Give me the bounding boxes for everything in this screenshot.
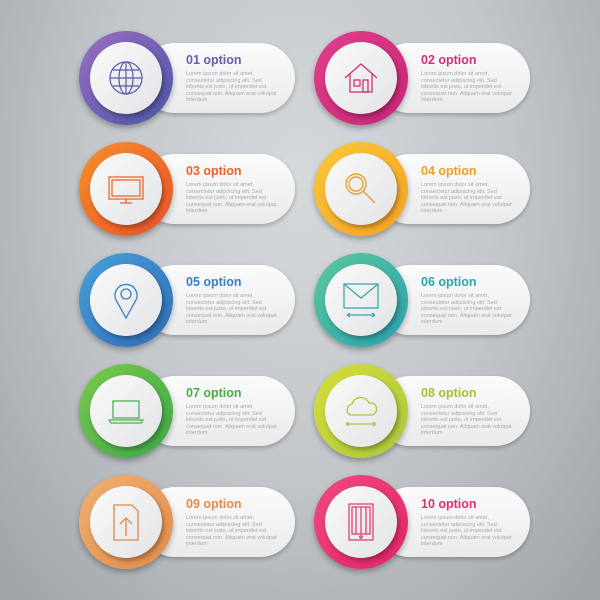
item 01: 01 option: [186, 53, 242, 67]
item 10: 10 option: [421, 497, 477, 511]
item 01: Lorem ipsum dolor sit amet, consectetur adipiscing elit. Sed lobortis est justo, ut imperdiet est consequat non. Aliquam erat volutpat interdum: [186, 71, 277, 103]
item 02: [311, 31, 532, 131]
item 06: [311, 253, 532, 353]
icon: laptop: [90, 375, 162, 447]
icon: house: [325, 42, 397, 114]
item 08: Lorem ipsum dolor sit amet, consectetur adipiscing elit. Sed lobortis est justo, ut imperdiet est consequat non. Aliquam erat volutpat interdum: [421, 404, 512, 436]
item 05: 05 option: [186, 275, 242, 289]
item 06: 06 option: [421, 275, 477, 289]
icon: envelope: [325, 264, 397, 336]
item 02: 02 option: [421, 53, 477, 67]
item 06: Lorem ipsum dolor sit amet, consectetur adipiscing elit. Sed lobortis est justo, ut imperdiet est consequat non. Aliquam erat volutpat interdum: [421, 293, 512, 325]
item 07: Lorem ipsum dolor sit amet, consectetur adipiscing elit. Sed lobortis est justo, ut imperdiet est consequat non. Aliquam erat volutpat interdum: [186, 404, 277, 436]
icon: magnifier: [325, 153, 397, 225]
item 09: Lorem ipsum dolor sit amet, consectetur adipiscing elit. Sed lobortis est justo, ut imperdiet est consequat non. Aliquam erat volutpat interdum: [186, 515, 277, 547]
icon: file upload: [90, 486, 162, 558]
item 07: [76, 364, 297, 464]
item 08: 08 option: [421, 386, 477, 400]
item 03: [76, 142, 297, 242]
icon: globe: [90, 42, 162, 114]
item 04: 04 option: [421, 164, 477, 178]
item 09: 09 option: [186, 497, 242, 511]
item 04: [311, 142, 532, 242]
item 04: Lorem ipsum dolor sit amet, consectetur adipiscing elit. Sed lobortis est justo, ut imperdiet est consequat non. Aliquam erat volutpat interdum: [421, 182, 512, 214]
icon: cloud: [325, 375, 397, 447]
item 05: [76, 253, 297, 353]
item 05: Lorem ipsum dolor sit amet, consectetur adipiscing elit. Sed lobortis est justo, ut imperdiet est consequat non. Aliquam erat volutpat interdum: [186, 293, 277, 325]
item 10: [311, 475, 532, 575]
item 01: [76, 31, 297, 131]
item 08: [311, 364, 532, 464]
icon: monitor: [90, 153, 162, 225]
icon: tablet: [325, 486, 397, 558]
item 10: Lorem ipsum dolor sit amet, consectetur adipiscing elit. Sed lobortis est justo, ut imperdiet est consequat non. Aliquam erat volutpat interdum: [421, 515, 512, 547]
item 03: 03 option: [186, 164, 242, 178]
icon: map pin: [90, 264, 162, 336]
item 03: Lorem ipsum dolor sit amet, consectetur adipiscing elit. Sed lobortis est justo, ut imperdiet est consequat non. Aliquam erat volutpat interdum: [186, 182, 277, 214]
item 07: 07 option: [186, 386, 242, 400]
item 02: Lorem ipsum dolor sit amet, consectetur adipiscing elit. Sed lobortis est justo, ut imperdiet est consequat non. Aliquam erat volutpat interdum: [421, 71, 512, 103]
item 09: [76, 475, 297, 575]
